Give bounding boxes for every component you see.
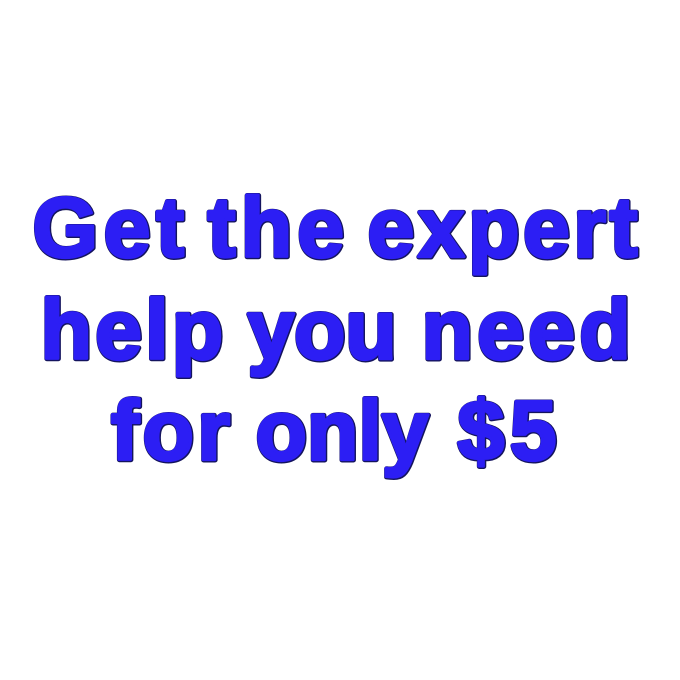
headline: expert — [368, 180, 638, 274]
headline: help — [40, 282, 223, 376]
headline: the — [208, 181, 344, 275]
headline: help — [41, 283, 224, 377]
headline: need — [422, 282, 630, 376]
headline: the — [208, 180, 344, 274]
headline: for — [111, 384, 230, 478]
headline: only — [256, 384, 429, 478]
headline: Get — [33, 181, 184, 275]
headline: need — [422, 283, 631, 377]
headline: you — [248, 283, 397, 377]
headline: only — [256, 384, 429, 478]
headline: Get — [32, 180, 184, 274]
headline: expert — [368, 181, 638, 275]
headline: $5 — [458, 384, 557, 478]
headline: for — [112, 384, 230, 478]
headline: you — [248, 282, 396, 376]
headline: $5 — [458, 384, 556, 478]
